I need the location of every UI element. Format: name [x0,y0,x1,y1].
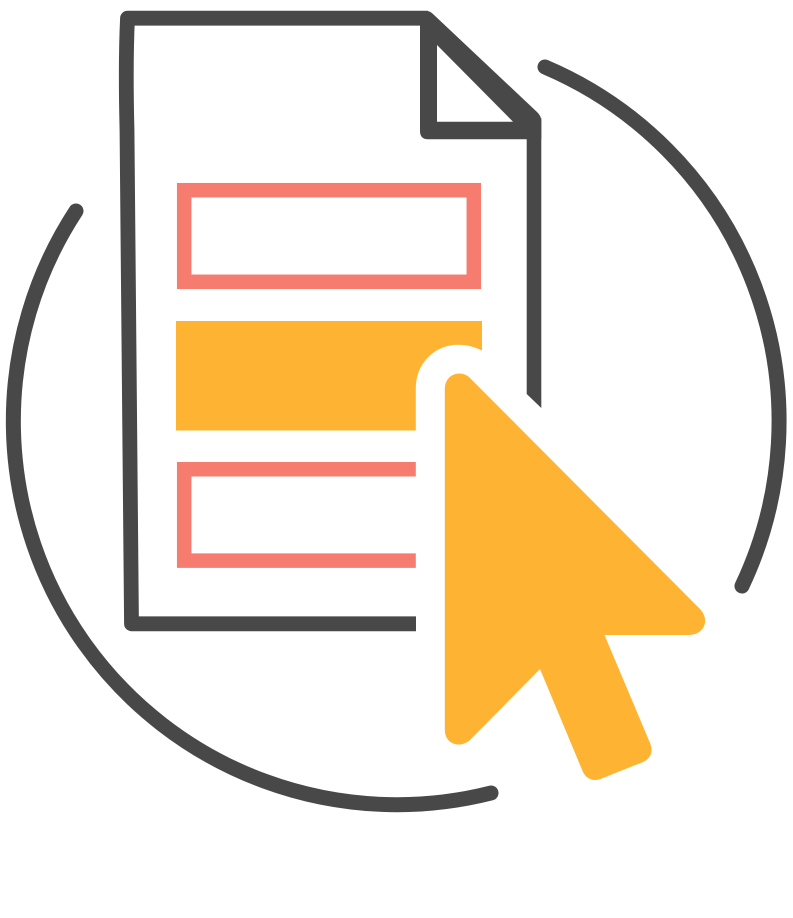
form field: middle filled [176,321,482,430]
form field: bottom outlined [184,469,416,561]
circular arc: left and bottom [13,211,491,805]
circular arc: upper right [545,67,779,586]
icon: cursor arrow [445,374,705,780]
form field: top outlined [184,190,474,282]
document folded corner [420,11,541,139]
document outline [126,18,428,624]
document right edge [527,118,541,408]
